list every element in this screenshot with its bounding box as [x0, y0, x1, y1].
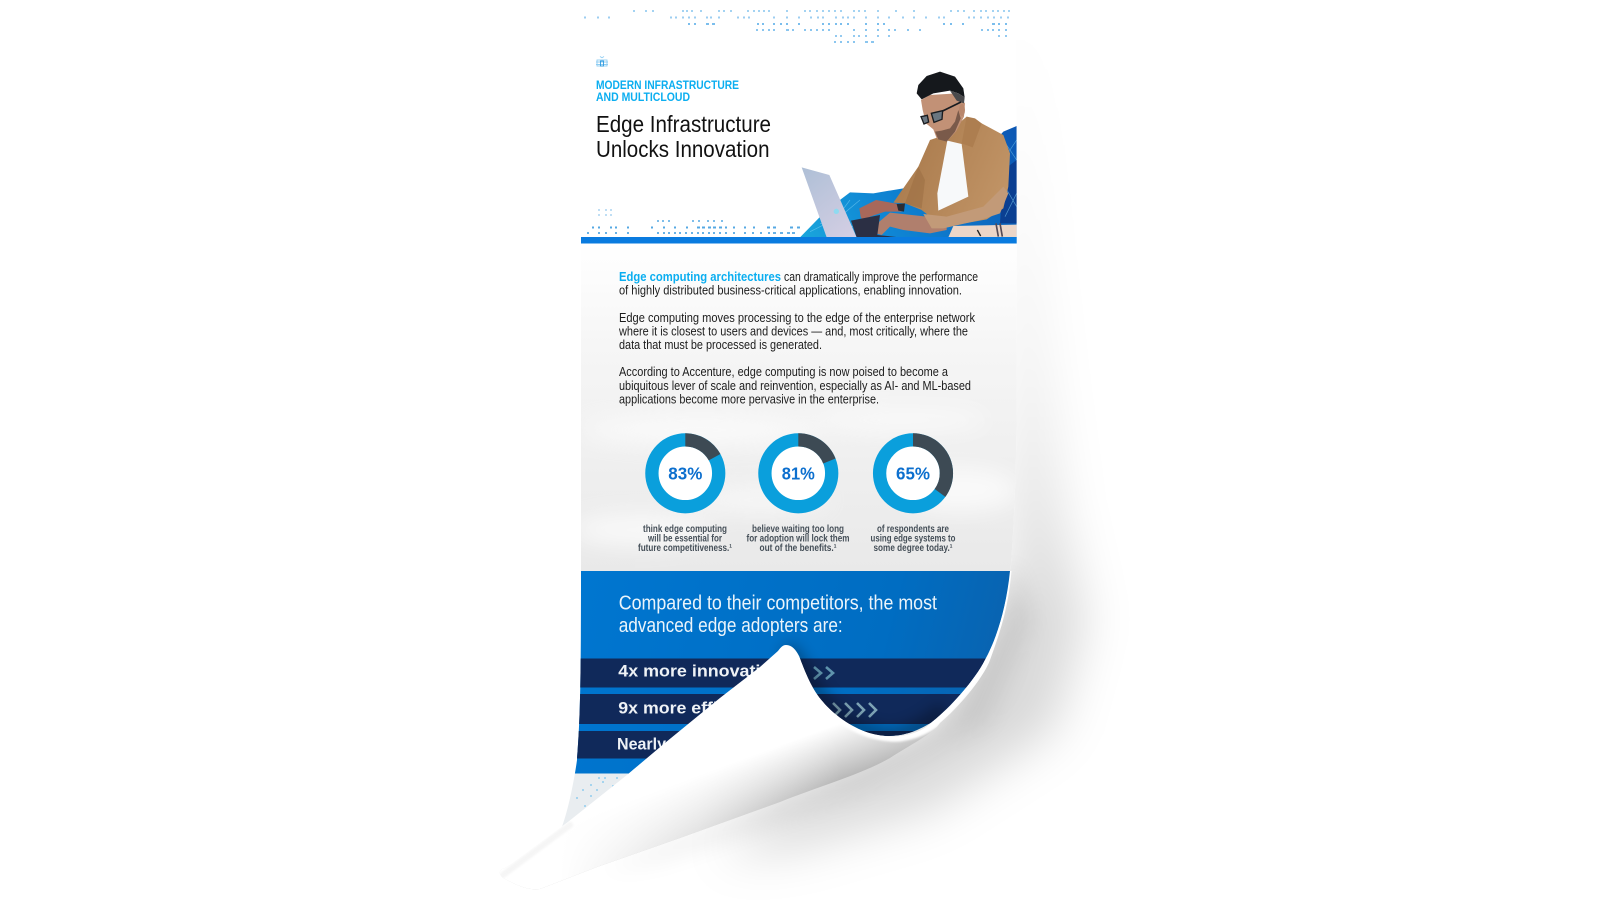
- caption: 83%: will be essential for: [647, 534, 722, 544]
- text block: introduction: data that must be processed is generated.: [619, 338, 822, 352]
- chart: 81% donut: 81%: [782, 464, 815, 484]
- title: Unlocks Innovation: [596, 136, 770, 162]
- chart: 65% donut: [880, 440, 946, 507]
- infographic page: [540, 0, 1020, 854]
- shadow cast on page by the curl: [786, 648, 945, 738]
- bottom dot pattern: [587, 210, 800, 233]
- chart: 81% donut: [765, 440, 832, 507]
- caption: 65%: [870, 524, 956, 554]
- caption: 81%: believe waiting too long: [752, 524, 844, 535]
- heading: advanced edge adopters are:: [619, 614, 843, 637]
- panel: header: [581, 11, 1017, 244]
- beard: [935, 110, 961, 142]
- page drop shadow: [600, 0, 1085, 872]
- ear: [959, 104, 965, 116]
- white rim of the curl: [503, 656, 987, 875]
- kicker heading: AND MULTICLOUD: [596, 90, 690, 104]
- chart: 83% donut: [652, 440, 719, 507]
- text block: introduction: can dramatically improve the performance: [784, 270, 978, 284]
- illustration: man at laptop on blue network landscape: [800, 72, 1017, 237]
- glasses: [921, 102, 961, 124]
- t-shirt: [937, 141, 968, 211]
- top dot pattern: [584, 11, 1010, 42]
- kicker heading: MODERN INFRASTRUCTURE: [596, 78, 739, 92]
- text block: introduction: ubiquitous lever of scale and reinvention, especially as AI- and ML-based: [619, 379, 971, 393]
- panel: competitors comparison: [540, 571, 1020, 774]
- shirt: [893, 117, 1010, 227]
- caption: 65%: using edge systems to: [870, 534, 956, 544]
- text block: introduction: According to Accenture, edge computing is now poised to become a: [619, 365, 948, 379]
- shirt sleeve: [923, 187, 1008, 228]
- arms and hands: [859, 200, 902, 218]
- caption: 81%: for adoption will lock them: [746, 534, 850, 544]
- caption: 81%: out of the benefits.¹: [760, 543, 836, 554]
- chart: 83% donut: 83%: [668, 464, 703, 484]
- text block: introduction: applications become more pervasive in the enterprise.: [619, 392, 879, 406]
- title: Edge Infrastructure: [596, 111, 771, 137]
- caption: 83%: [638, 524, 732, 554]
- bar: 4x more innovative: [580, 658, 986, 688]
- text block: introduction: Edge computing architectures: [619, 270, 781, 284]
- text block: introduction: of highly distributed business-critical applications, enabling innovation.: [619, 284, 962, 298]
- panel: intro background: [581, 336, 1016, 571]
- bar: nearly: [577, 731, 914, 758]
- neck and face: [921, 93, 965, 142]
- bar: 4x more innovative: 4x more innovative: [618, 662, 780, 680]
- text block: introduction: where it is closest to users and devices — and, most critically, where the: [618, 324, 968, 338]
- blue network landscape: [800, 126, 1017, 237]
- laptop lid: [802, 167, 857, 237]
- bar: nearly: Nearly: [617, 734, 667, 754]
- keyboard: [851, 215, 900, 237]
- hair: [917, 72, 965, 99]
- heading: Compared to their competitors, the most: [619, 592, 937, 614]
- curled page corner: [490, 571, 1012, 895]
- caption: 65%: of respondents are: [877, 524, 949, 535]
- collar: [962, 117, 982, 147]
- bar: 9x more efficient: [579, 694, 960, 724]
- caption: 83%: future competitiveness.¹: [638, 543, 732, 554]
- desk: [948, 225, 1017, 237]
- blue bar under header: [581, 237, 1017, 244]
- caption: 81%: [746, 524, 849, 551]
- chart: 65% donut: 65%: [896, 464, 930, 484]
- panel: page footer dots: [562, 774, 628, 826]
- text block: introduction: [618, 270, 978, 406]
- caption: 65%: some degree today.¹: [874, 543, 952, 554]
- icon: logo: [596, 56, 608, 66]
- kicker heading: [596, 80, 739, 101]
- text block: introduction: Edge computing moves processing to the edge of the enterprise network: [619, 311, 976, 325]
- heading: [619, 592, 937, 637]
- title: [598, 115, 770, 157]
- caption: 83%: think edge computing: [643, 524, 727, 535]
- bar: 9x more efficient: 9x more efficient: [618, 698, 760, 718]
